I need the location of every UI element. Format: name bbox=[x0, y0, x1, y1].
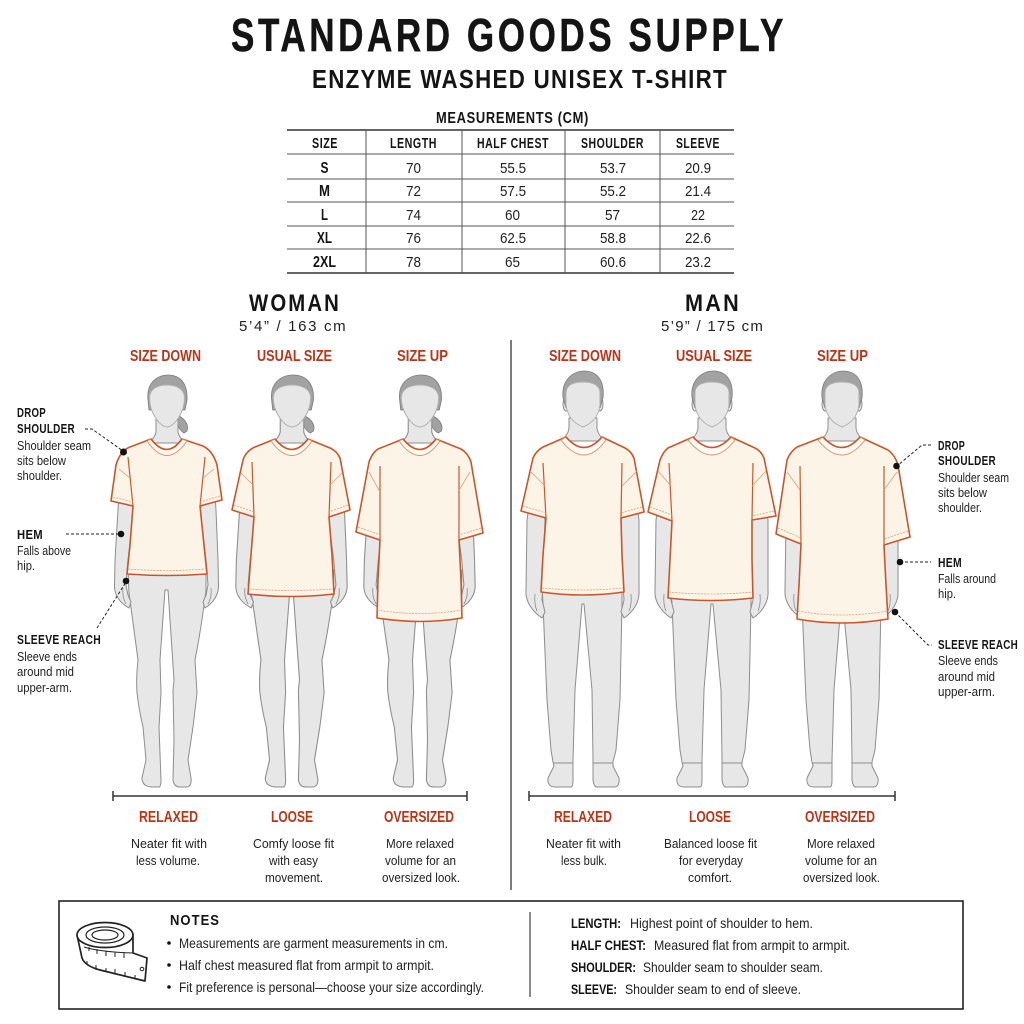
subtitle: ENZYME WASHED UNISEX T-SHIRT bbox=[312, 66, 728, 94]
callout: drop shoulder: SHOULDER bbox=[938, 453, 996, 468]
notes heading: NOTES bbox=[170, 912, 220, 929]
fit descriptions: man: for everyday bbox=[679, 853, 743, 868]
fit descriptions: man: LOOSE bbox=[689, 809, 731, 826]
notes list: Fit preference is personal—choose your size accordingly. bbox=[179, 979, 484, 995]
callout: drop shoulder: DROP bbox=[938, 438, 965, 453]
table rows: 57.5 bbox=[500, 183, 526, 200]
figure: woman relaxed fit bbox=[111, 375, 222, 787]
figure: man relaxed fit bbox=[521, 371, 644, 787]
callout: hem: hip. bbox=[938, 587, 956, 601]
size labels: woman: SIZE UP bbox=[397, 348, 448, 365]
table rows: 76 bbox=[406, 230, 421, 247]
measurement definitions: LENGTH: bbox=[571, 915, 621, 931]
size labels: man bbox=[549, 348, 868, 365]
size labels: man: SIZE UP bbox=[817, 348, 868, 365]
table rows: 22 bbox=[691, 207, 705, 224]
figure: man oversized fit bbox=[776, 371, 910, 787]
callout: sleeve reach bbox=[17, 578, 129, 695]
table rows: 22.6 bbox=[685, 230, 711, 247]
callout: drop shoulder: Shoulder seam bbox=[17, 439, 91, 453]
callout: hem: Falls around bbox=[938, 572, 996, 586]
title: STANDARD GOODS SUPPLY bbox=[231, 9, 787, 61]
callout: drop shoulder: SHOULDER bbox=[17, 421, 75, 436]
fit descriptions: man: less bulk. bbox=[561, 853, 607, 868]
callout: drop shoulder bbox=[893, 438, 1009, 515]
callout: sleeve reach: SLEEVE REACH bbox=[17, 632, 101, 647]
callout: hem: Falls above bbox=[17, 544, 71, 558]
table header row: LENGTH bbox=[390, 136, 437, 152]
fit descriptions: man: Neater fit with bbox=[546, 836, 621, 851]
fit descriptions: woman: oversized look. bbox=[382, 870, 460, 885]
measurement definitions: SHOULDER: bbox=[571, 959, 636, 975]
size labels: woman bbox=[130, 348, 448, 365]
callout: drop shoulder: Shoulder seam bbox=[938, 471, 1009, 485]
fit descriptions: woman bbox=[131, 809, 460, 885]
callout: hem: HEM bbox=[17, 527, 43, 542]
man height: 5’9” / 175 cm bbox=[661, 318, 764, 335]
measurement definitions bbox=[571, 915, 850, 997]
table rows: 21.4 bbox=[685, 183, 711, 200]
fit descriptions: woman: OVERSIZED bbox=[384, 809, 454, 826]
table rows: 60 bbox=[505, 207, 520, 224]
fit descriptions: woman: volume for an bbox=[385, 853, 456, 868]
notes list: Half chest measured flat from armpit to armpit. bbox=[179, 957, 434, 973]
callout: sleeve reach: upper-arm. bbox=[17, 681, 72, 695]
measurement definitions: HALF CHEST: bbox=[571, 937, 646, 953]
size labels: woman: USUAL SIZE bbox=[257, 348, 332, 365]
callouts: woman bbox=[17, 405, 129, 695]
fit descriptions: man: Balanced loose fit bbox=[664, 836, 757, 851]
table rows: 55.2 bbox=[600, 183, 626, 200]
callout: drop shoulder bbox=[17, 405, 127, 483]
heading: man: MAN bbox=[685, 290, 741, 317]
fit descriptions: man: oversized look. bbox=[803, 870, 880, 885]
callout: sleeve reach: around mid bbox=[938, 670, 995, 684]
measurement definitions: SLEEVE: bbox=[571, 981, 617, 997]
table header row bbox=[312, 136, 720, 152]
table rows: 2XL bbox=[313, 254, 336, 271]
fit descriptions: woman: Comfy loose fit bbox=[253, 836, 334, 851]
callout: drop shoulder: sits below bbox=[17, 454, 67, 468]
fit descriptions: woman: with easy bbox=[268, 853, 318, 868]
table rows: 55.5 bbox=[500, 160, 526, 177]
callout: sleeve reach: Sleeve ends bbox=[938, 654, 998, 668]
notes list bbox=[167, 935, 484, 995]
woman height: 5’4” / 163 cm bbox=[239, 318, 347, 335]
table rows: 78 bbox=[406, 254, 421, 271]
fit descriptions: man: volume for an bbox=[805, 853, 877, 868]
table rows: 72 bbox=[406, 183, 421, 200]
table header row: SIZE bbox=[312, 136, 338, 152]
fit scale: man bbox=[529, 791, 895, 801]
table heading: MEASUREMENTS (CM) bbox=[436, 110, 589, 127]
centre divider bbox=[510, 340, 512, 890]
callout: sleeve reach: upper-arm. bbox=[938, 685, 995, 699]
callout: hem bbox=[17, 527, 124, 573]
callout: drop shoulder: DROP bbox=[17, 405, 46, 420]
callout: drop shoulder: shoulder. bbox=[938, 501, 982, 515]
table rows: 57 bbox=[605, 207, 620, 224]
fit descriptions: woman: movement. bbox=[265, 870, 323, 885]
table rows: L bbox=[321, 207, 328, 224]
measurements table bbox=[287, 110, 734, 273]
table rows: S bbox=[320, 160, 328, 177]
callout: sleeve reach: Sleeve ends bbox=[17, 650, 77, 664]
icon: tape measure bbox=[77, 922, 147, 981]
notes panel bbox=[59, 901, 963, 1009]
figure: man loose fit bbox=[648, 371, 776, 787]
callouts: man bbox=[892, 438, 1018, 699]
fit descriptions: man: RELAXED bbox=[554, 809, 612, 826]
fit descriptions: man: OVERSIZED bbox=[805, 809, 875, 826]
callout: hem: hip. bbox=[17, 559, 35, 573]
fit descriptions: woman: Neater fit with bbox=[131, 836, 207, 851]
table rows: 74 bbox=[406, 207, 421, 224]
table header row: HALF CHEST bbox=[477, 136, 549, 152]
fit descriptions: woman: less volume. bbox=[136, 853, 200, 868]
fit descriptions: woman: More relaxed bbox=[386, 836, 454, 851]
fit descriptions: man bbox=[546, 809, 880, 885]
callout: sleeve reach bbox=[892, 609, 1018, 699]
figure: woman loose fit bbox=[232, 375, 350, 787]
callout: hem: HEM bbox=[938, 555, 962, 570]
figure: woman oversized fit bbox=[356, 375, 483, 787]
notes list: Measurements are garment measurements in cm. bbox=[179, 935, 448, 951]
table rows: 23.2 bbox=[685, 254, 711, 271]
table rows bbox=[313, 160, 711, 271]
measurement definitions: Shoulder seam to shoulder seam. bbox=[643, 959, 823, 975]
fit descriptions: woman: LOOSE bbox=[271, 809, 313, 826]
callout: drop shoulder: sits below bbox=[938, 486, 988, 500]
table rows: 65 bbox=[505, 254, 520, 271]
table rows: 70 bbox=[406, 160, 421, 177]
size labels: man: USUAL SIZE bbox=[676, 348, 752, 365]
table rows: 60.6 bbox=[600, 254, 626, 271]
table rows: 58.8 bbox=[600, 230, 626, 247]
table rows: XL bbox=[317, 230, 332, 247]
fit descriptions: woman: RELAXED bbox=[139, 809, 198, 826]
table rows: 62.5 bbox=[500, 230, 526, 247]
measurement definitions: Highest point of shoulder to hem. bbox=[630, 915, 813, 931]
table rows: 53.7 bbox=[600, 160, 626, 177]
fit descriptions: man: More relaxed bbox=[807, 836, 875, 851]
size labels: woman: SIZE DOWN bbox=[130, 348, 201, 365]
heading: woman: WOMAN bbox=[249, 290, 341, 317]
table header row: SLEEVE bbox=[676, 136, 720, 152]
table rows: M bbox=[319, 183, 330, 200]
fit scale: woman bbox=[113, 791, 467, 801]
table rows: 20.9 bbox=[685, 160, 711, 177]
table header row: SHOULDER bbox=[581, 136, 644, 152]
callout: drop shoulder: shoulder. bbox=[17, 469, 62, 483]
callout: hem bbox=[897, 555, 996, 601]
measurement definitions: Shoulder seam to end of sleeve. bbox=[625, 981, 801, 997]
size labels: man: SIZE DOWN bbox=[549, 348, 621, 365]
measurement definitions: Measured flat from armpit to armpit. bbox=[654, 937, 850, 953]
fit descriptions: man: comfort. bbox=[688, 870, 732, 885]
callout: sleeve reach: around mid bbox=[17, 665, 74, 679]
